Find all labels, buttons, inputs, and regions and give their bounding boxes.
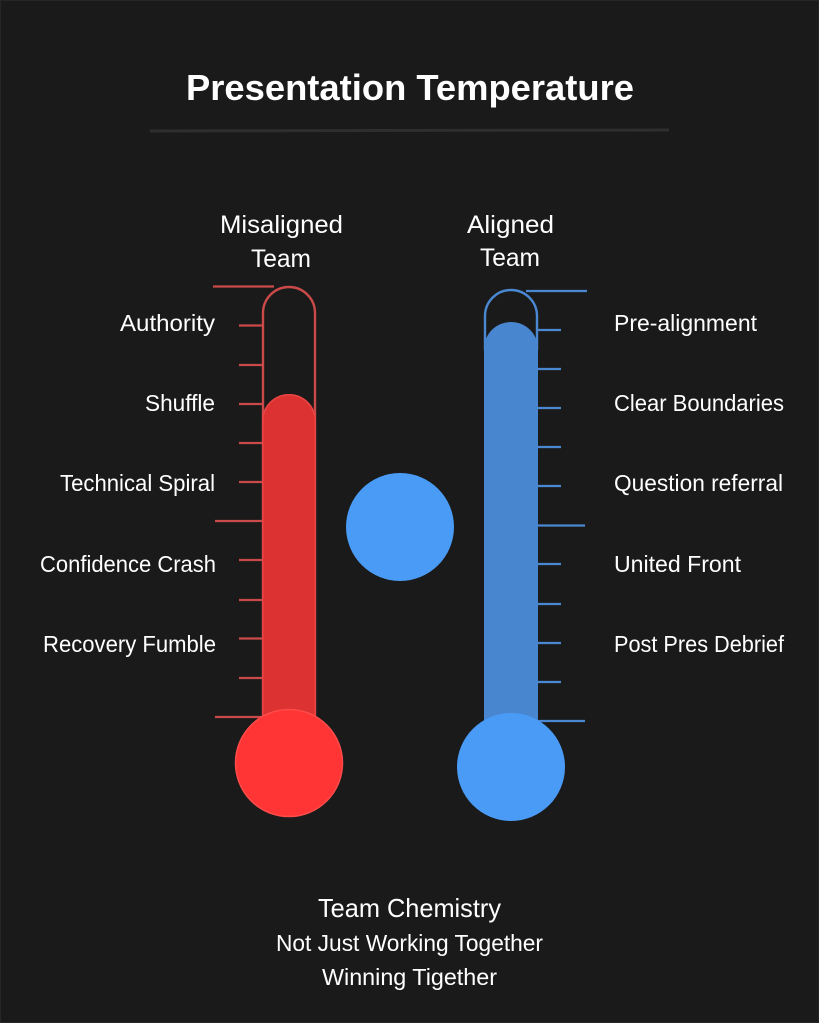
footer caption: Winning Tigether xyxy=(322,964,497,990)
red side labels: Technical Spiral xyxy=(60,470,215,496)
heading: aligned team: Team xyxy=(480,244,540,272)
red side labels: Authority xyxy=(120,310,216,336)
blue side labels xyxy=(614,310,785,657)
red side labels: Recovery Fumble xyxy=(43,631,216,657)
red thermometer: misaligned team xyxy=(236,287,342,816)
blue thermometer: aligned team xyxy=(457,290,565,821)
heading: misaligned team: Misaligned xyxy=(220,211,343,239)
footer caption: Not Just Working Together xyxy=(276,930,543,956)
blue side labels: Post Pres Debrief xyxy=(614,631,785,657)
heading: aligned team: Aligned xyxy=(467,211,554,239)
red thermometer scale ticks xyxy=(213,286,274,717)
blue side labels: Clear Boundaries xyxy=(614,390,784,416)
footer caption xyxy=(276,893,543,990)
blue side labels: Question referral xyxy=(614,470,783,496)
blue thermometer scale ticks xyxy=(526,291,587,721)
footer caption: Team Chemistry xyxy=(318,893,501,923)
heading: aligned team xyxy=(467,211,554,272)
blue side labels: Pre-alignment xyxy=(614,310,758,336)
heading: misaligned team xyxy=(220,211,343,273)
center blue circle xyxy=(346,473,454,581)
red side labels: Shuffle xyxy=(145,390,215,416)
red side labels: Confidence Crash xyxy=(40,551,216,577)
red side labels xyxy=(40,310,216,657)
title: Presentation Temperature xyxy=(186,67,634,108)
blue side labels: United Front xyxy=(614,551,742,577)
heading: misaligned team: Team xyxy=(251,245,311,273)
